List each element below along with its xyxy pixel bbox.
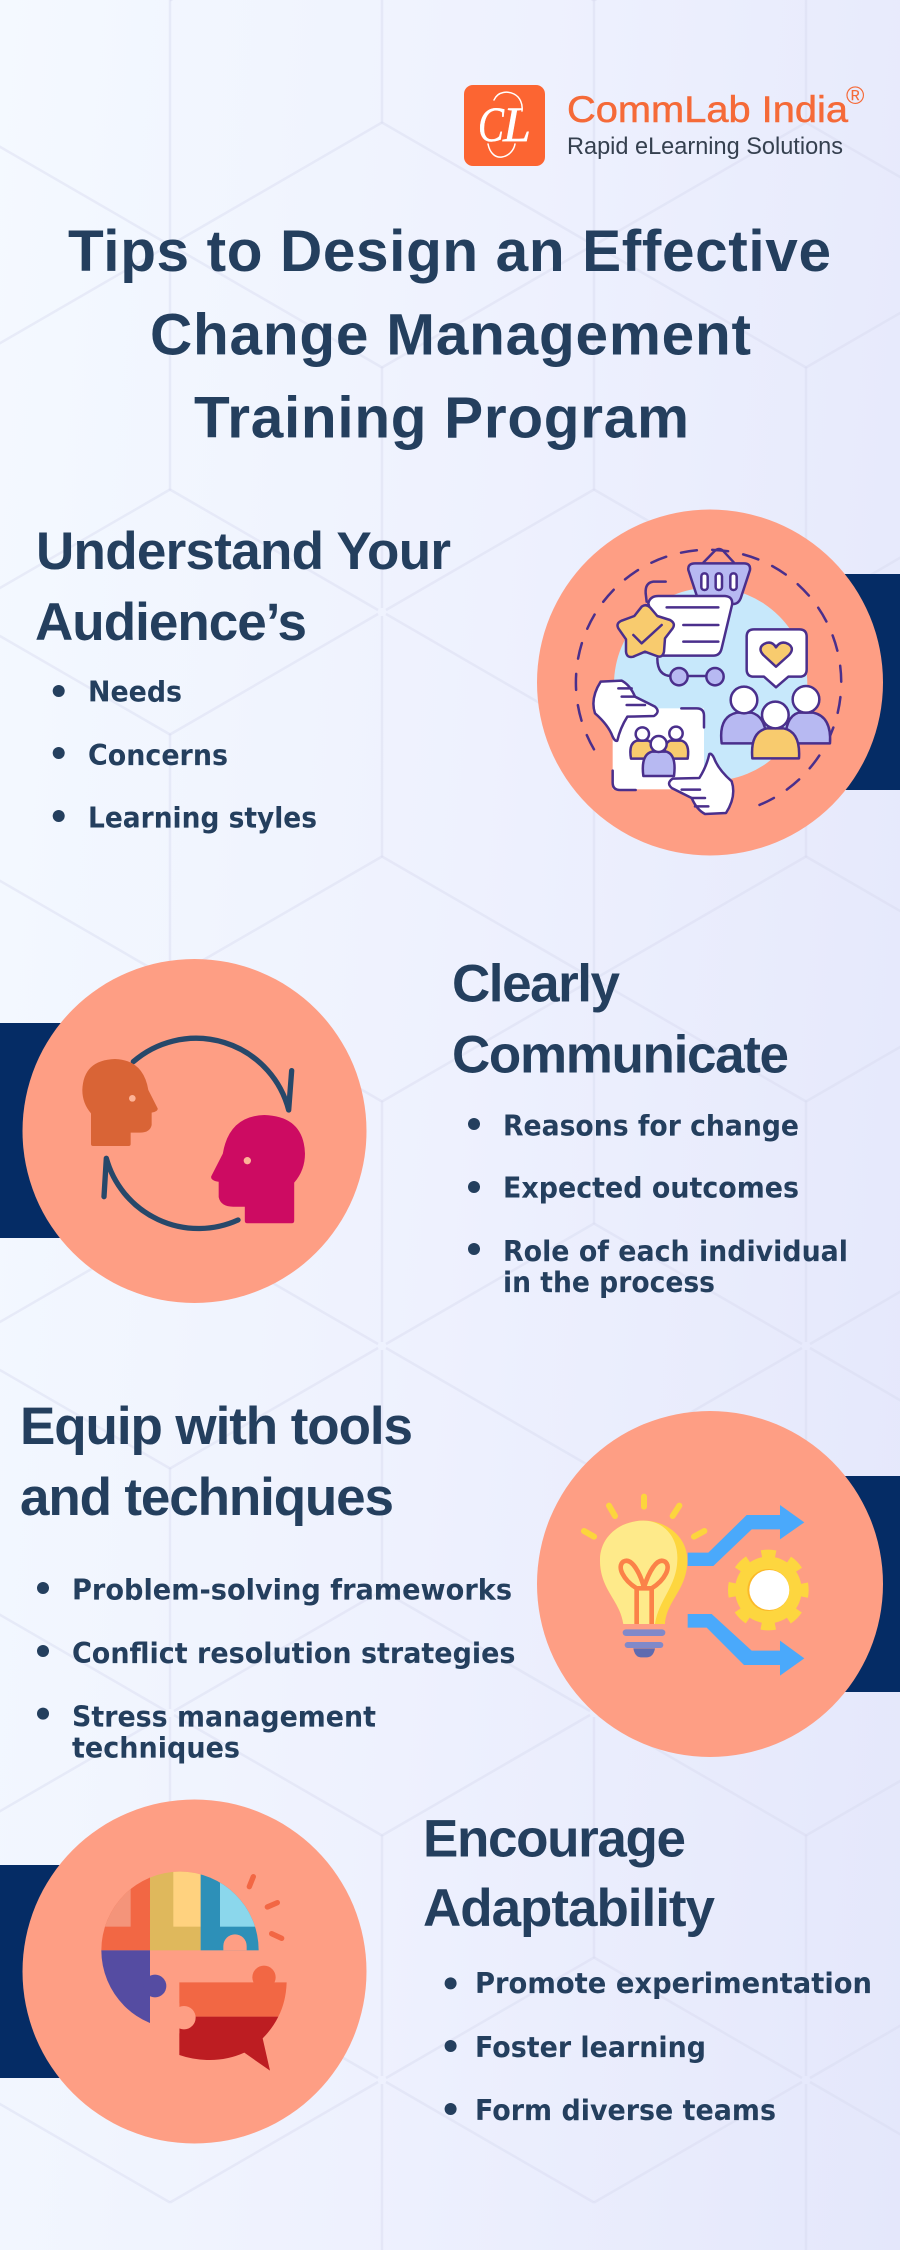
heading: equip: and techniques (20, 1468, 394, 1527)
icon: puzzle head (100, 1870, 287, 2071)
logo name: CommLab India (567, 89, 848, 130)
logo: CommLab India (464, 82, 865, 166)
icon circle: tools (537, 1411, 883, 1757)
logo mark: C (478, 96, 504, 152)
title (68, 219, 831, 450)
bullet list: tools: Stress management (72, 1700, 376, 1733)
light rays (584, 1497, 704, 1537)
audience group (721, 686, 830, 758)
star with check (618, 605, 674, 657)
icon circle: communication (22, 959, 366, 1303)
bullet list: communicate: Expected outcomes (503, 1172, 799, 1205)
accent bar (840, 574, 900, 790)
bullet list: communicate: Reasons for change (503, 1110, 799, 1143)
heading: encourage adaptability (423, 1810, 716, 1938)
shopping basket (688, 549, 750, 604)
panel: clearly communicate (0, 955, 848, 1303)
bullet list: adaptability: Foster learning (475, 2031, 706, 2064)
heading: clearly communicate: Communicate (452, 1026, 789, 1085)
heading: clearly communicate (452, 955, 789, 1085)
bullet list: audience: Learning styles (88, 802, 317, 835)
accent bar (0, 1865, 70, 2078)
spark lines (249, 1877, 282, 1938)
panel: understand your audience (35, 510, 900, 856)
heading: equip: Equip with tools (20, 1397, 413, 1456)
icon: audience research (576, 549, 841, 814)
lower arrow (688, 1614, 804, 1676)
bullet list: audience: Needs (88, 676, 182, 709)
title: Tips to Design an Effective (68, 219, 831, 284)
framing hands (593, 681, 733, 814)
bullet list: audience: Concerns (88, 739, 228, 772)
upper arrow (688, 1505, 804, 1566)
accent bar (0, 1023, 70, 1238)
bulb (600, 1521, 687, 1657)
title: Change Management (150, 302, 751, 368)
accent bar (840, 1476, 900, 1692)
heading: understand your audience: Audience’s (35, 593, 307, 652)
speech bubble puzzle piece (172, 1966, 287, 2071)
orange head (82, 1059, 158, 1146)
bullet list: communicate: Role of each individual (503, 1235, 848, 1268)
icon: two heads exchanging (82, 1038, 305, 1229)
bullet list: adaptability (445, 1967, 872, 2127)
cart card (646, 582, 732, 685)
heading: encourage adaptability: Adaptability (423, 1879, 716, 1938)
panel: encourage adaptability (0, 1800, 872, 2144)
logo mark (464, 85, 545, 166)
bullet list: tools (37, 1574, 516, 1765)
bullet list: communicate (468, 1110, 848, 1299)
panel: equip with tools and techniques (20, 1397, 900, 1765)
heading: encourage adaptability: Encourage (423, 1810, 686, 1868)
bullet list: adaptability: Promote experimentation (475, 1967, 872, 2000)
bullet list: audience (53, 676, 317, 835)
pink head (211, 1115, 305, 1223)
heading: understand your audience: Understand Your (36, 522, 451, 581)
puzzle brain (100, 1870, 261, 2029)
icon circle: adaptability (22, 1800, 366, 2144)
cycle arrows (104, 1038, 292, 1229)
bullet list: tools: Problem-solving frameworks (72, 1574, 512, 1606)
heading: clearly communicate: Clearly (452, 955, 621, 1014)
bullet list: tools: techniques (72, 1732, 240, 1765)
icon: light bulb, arrows and gear (584, 1497, 804, 1676)
title: Training Program (194, 386, 689, 450)
registered mark: ® (846, 82, 865, 110)
bullet list: communicate: in the process (503, 1266, 715, 1299)
icon circle: audience research (537, 510, 883, 856)
logo mark: L (502, 96, 531, 152)
bullet list: adaptability: Form diverse teams (475, 2094, 776, 2127)
bullet list: tools: Conflict resolution strategies (72, 1637, 516, 1670)
heading: understand your audience (35, 522, 451, 652)
speech bubble with heart (747, 629, 807, 687)
heading: equip (20, 1397, 413, 1527)
logo tagline: Rapid eLearning Solutions (567, 133, 843, 160)
gear (732, 1554, 804, 1626)
photo frame with people (613, 708, 704, 790)
